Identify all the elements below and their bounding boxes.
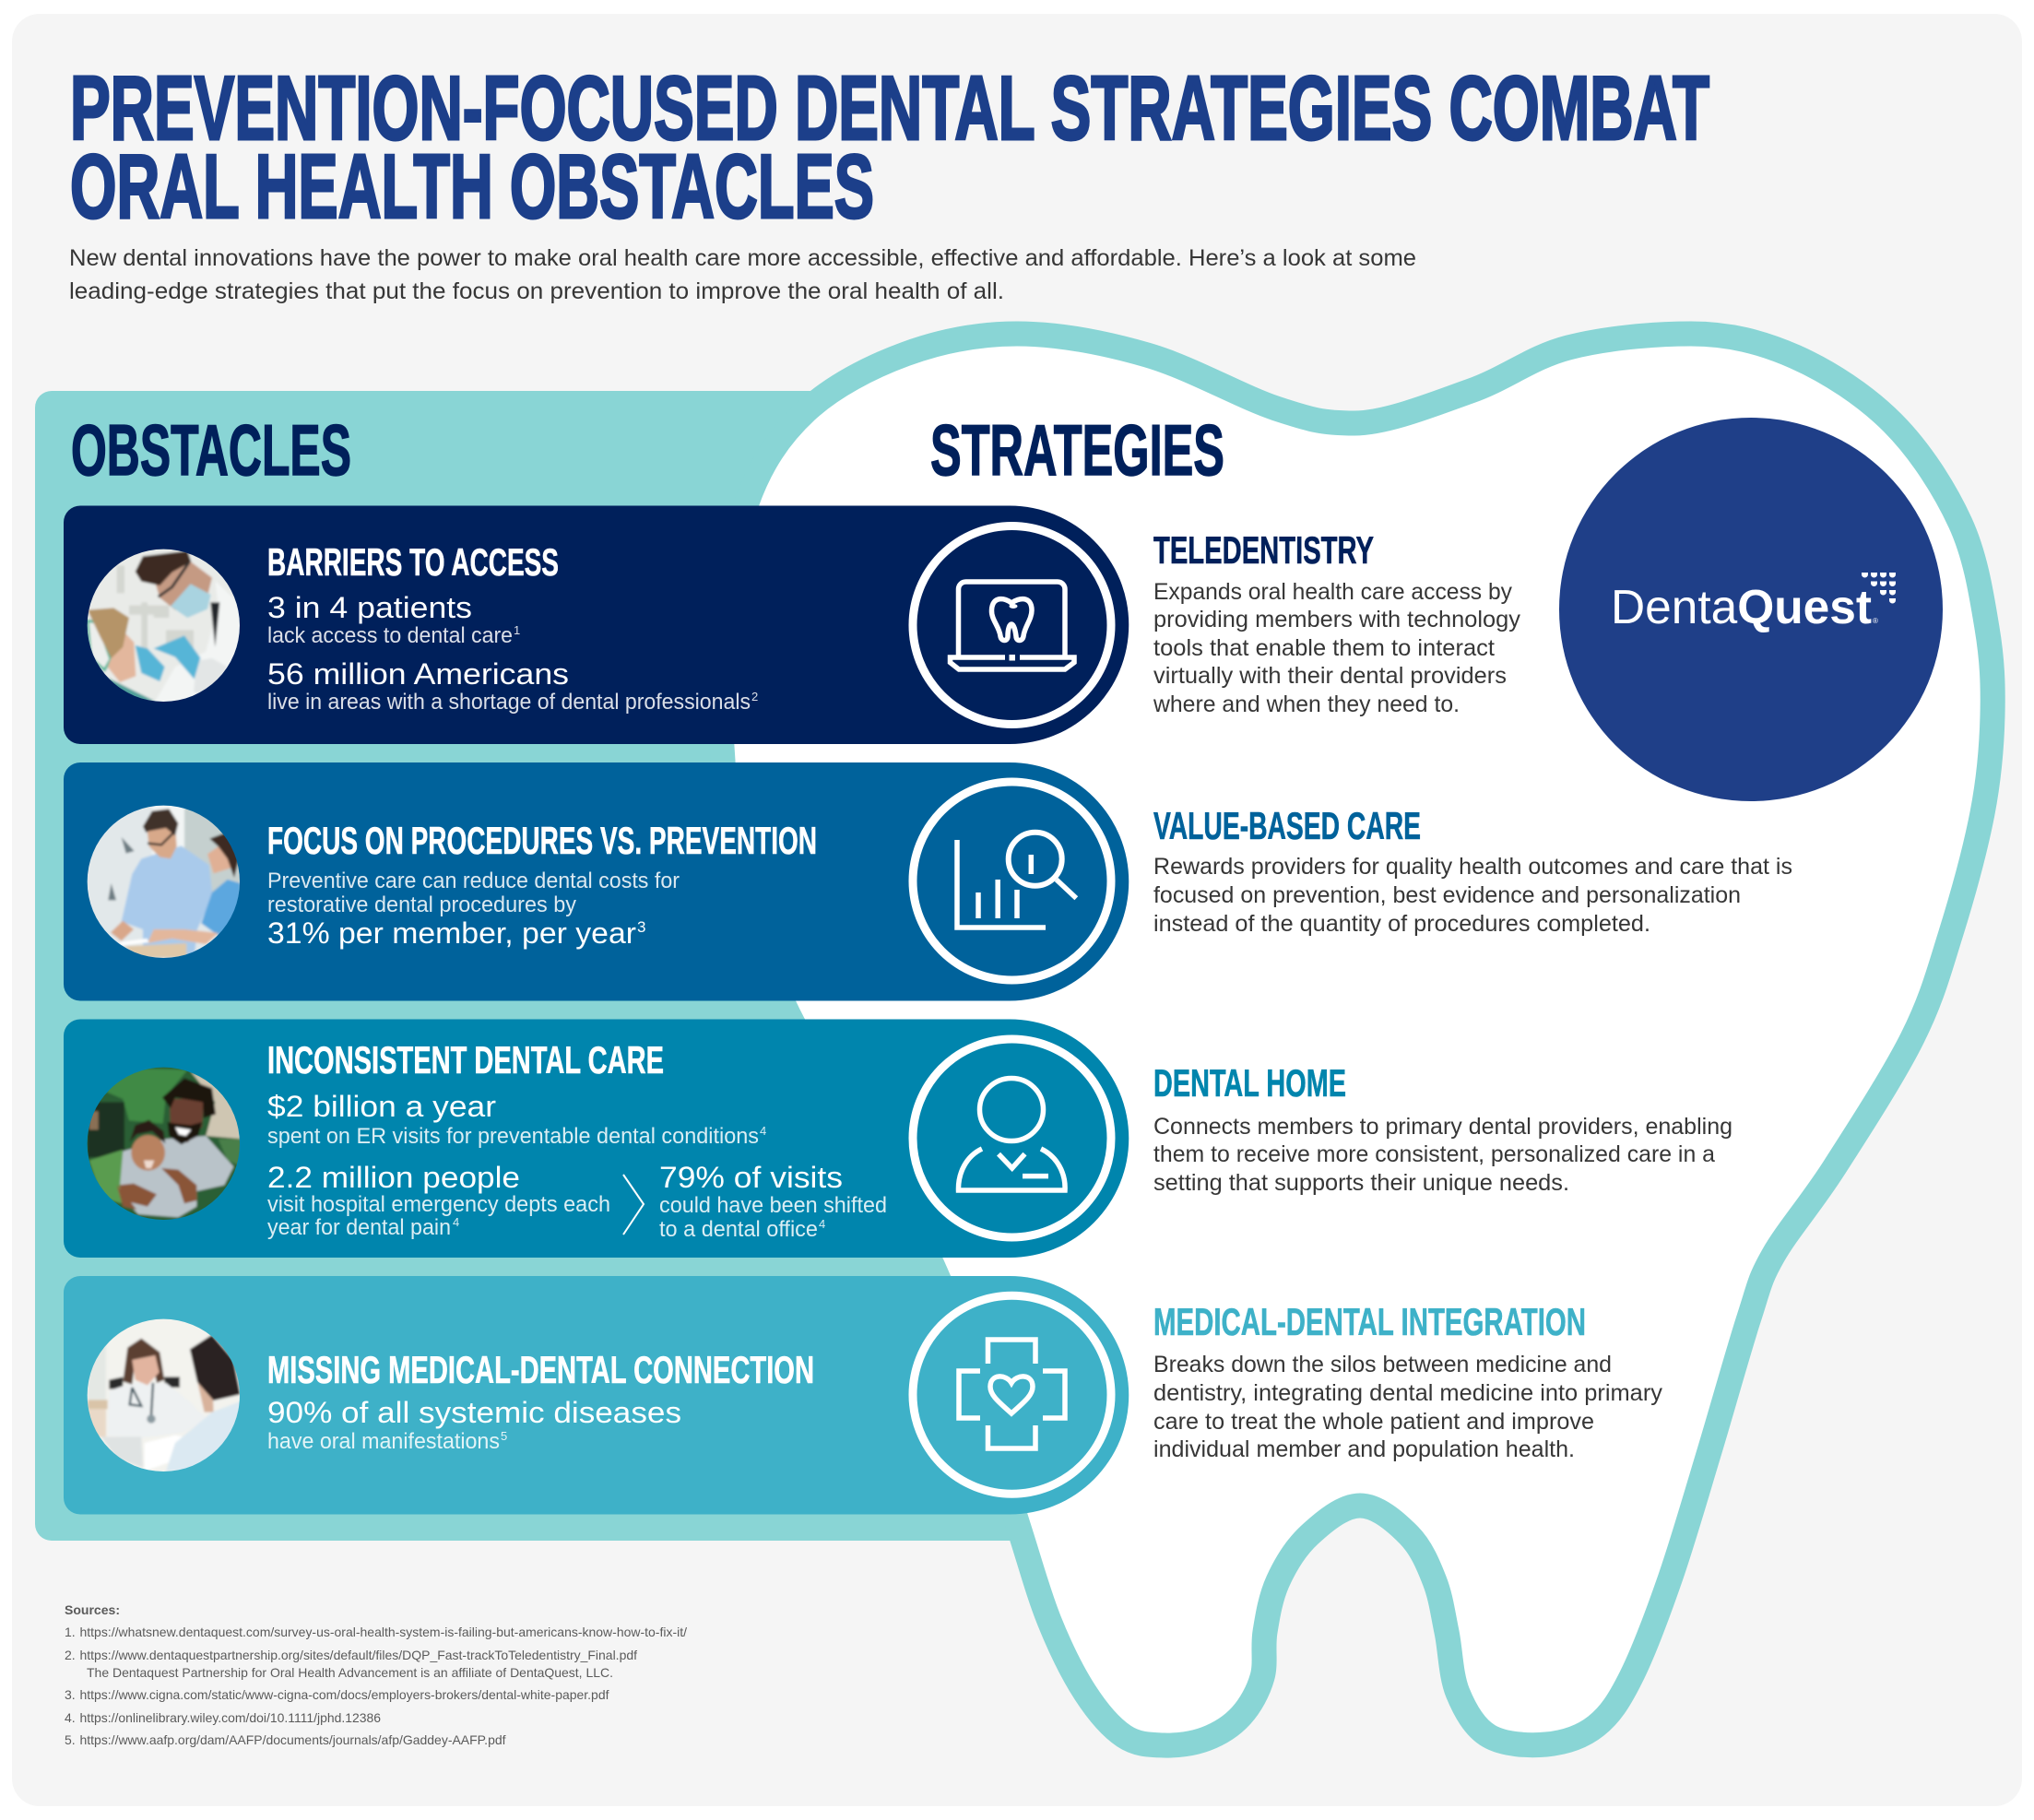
- strategy: medical-dental integration: MEDICAL-DENTAL INTEGRATION: [1153, 1300, 1586, 1343]
- obstacles heading: OBSTACLES: [71, 409, 351, 490]
- strategies heading: STRATEGIES: [930, 409, 1224, 490]
- text: inconsistent dental care: visit hospital emergency depts each: [267, 1192, 610, 1217]
- strategy: teledentistry: virtually with their dental providers: [1153, 663, 1507, 689]
- strategy: dental home: them to receive more consistent, personalized care in a: [1153, 1141, 1715, 1167]
- text: missing medical-dental connection: MISSING MEDICAL-DENTAL CONNECTION: [267, 1348, 814, 1391]
- strategy: teledentistry: [1153, 528, 1521, 717]
- text: inconsistent dental care: $2 billion a year: [267, 1090, 496, 1123]
- title: ORAL HEALTH OBSTACLES: [70, 136, 874, 237]
- strategy: teledentistry: Expands oral health care access by: [1153, 579, 1512, 605]
- icon: chart with magnifier: [913, 782, 1111, 980]
- text: inconsistent dental care: INCONSISTENT DENTAL CARE: [267, 1038, 664, 1081]
- arrow: chevron: [623, 1175, 644, 1235]
- strategy: dental home: [1153, 1061, 1732, 1196]
- text: focus on procedures vs prevention: 31% per member, per year: [267, 916, 636, 950]
- strategy: dental home: DENTAL HOME: [1153, 1061, 1346, 1105]
- text: barriers to access: 1: [514, 623, 520, 637]
- logo circle: DentaQuest: ®: [1873, 617, 1878, 625]
- text: inconsistent dental care: 2.2 million people: [267, 1161, 520, 1194]
- logo circle: DentaQuest: DentaQuest: [1611, 581, 1872, 634]
- text: focus on procedures vs prevention: restorative dental procedures by: [267, 892, 576, 917]
- text: focus on procedures vs prevention: 3: [637, 918, 645, 936]
- obstacles teal panel: [35, 391, 1012, 1541]
- sources: https://www.aafp.org/dam/AAFP/documents/journals/afp/Gaddey-AAFP.pdf: [79, 1732, 506, 1747]
- sources: https://onlinelibrary.wiley.com/doi/10.1111/jphd.12386: [79, 1710, 381, 1725]
- photo: doctor and patient: [87, 1318, 240, 1471]
- strategy: teledentistry: providing members with technology: [1153, 607, 1521, 632]
- logo circle: DentaQuest: [1559, 418, 1943, 801]
- sources: 1.: [65, 1625, 76, 1639]
- sources: https://whatsnew.dentaquest.com/survey-us-oral-health-system-is-failing-but-americans-know-how-to-fix-it/: [79, 1625, 687, 1639]
- text: missing medical-dental connection: 5: [501, 1429, 507, 1443]
- panel: inconsistent dental care: [64, 1020, 1129, 1258]
- intro text: leading-edge strategies that put the focus on prevention to improve the oral health of all.: [69, 278, 1004, 304]
- sources: The Dentaquest Partnership for Oral Health Advancement is an affiliate of DentaQuest, LLC.: [87, 1665, 613, 1680]
- photo: man and woman at a desk: [87, 806, 240, 958]
- text: focus on procedures vs prevention: FOCUS ON PROCEDURES VS. PREVENTION: [267, 819, 817, 862]
- sources: https://www.cigna.com/static/www-cigna-com/docs/employers-brokers/dental-white-paper.pdf: [79, 1687, 609, 1702]
- panel: missing medical-dental connection: [64, 1276, 1129, 1514]
- text: focus on procedures vs prevention: Preventive care can reduce dental costs for: [267, 869, 680, 893]
- text: missing medical-dental connection: [267, 1348, 814, 1454]
- text: missing medical-dental connection: 90% of all systemic diseases: [267, 1396, 681, 1429]
- photo: dentist with child: [87, 550, 240, 702]
- text: barriers to access: [267, 540, 758, 715]
- icon: dental provider: [913, 1039, 1111, 1237]
- text: inconsistent dental care: [267, 1038, 887, 1242]
- text: barriers to access: 2: [751, 690, 758, 703]
- intro text: [69, 245, 1416, 304]
- text: barriers to access: 3 in 4 patients: [267, 591, 472, 624]
- tooth outline: [719, 334, 1993, 1745]
- text: inconsistent dental care: year for dental pain: [267, 1215, 451, 1240]
- sources: https://www.dentaquestpartnership.org/sites/default/files/DQP_Fast-trackToTeledentistry_Final.pdf: [79, 1648, 637, 1662]
- text: focus on procedures vs prevention: [267, 819, 817, 950]
- strategy: value-based care: Rewards providers for quality health outcomes and care that is: [1153, 854, 1792, 880]
- text: inconsistent dental care: 4: [453, 1215, 459, 1229]
- strategy: value-based care: VALUE-BASED CARE: [1153, 804, 1421, 847]
- strategy: teledentistry: where and when they need to.: [1153, 691, 1460, 717]
- title: [70, 57, 1709, 237]
- panel: barriers to access: [64, 505, 1129, 744]
- strategy: value-based care: instead of the quantity of procedures completed.: [1153, 911, 1650, 937]
- text: inconsistent dental care: 79% of visits: [659, 1161, 843, 1194]
- strategy: dental home: Connects members to primary dental providers, enabling: [1153, 1114, 1732, 1140]
- text: missing medical-dental connection: have oral manifestations: [267, 1429, 500, 1454]
- strategy: medical-dental integration: Breaks down the silos between medicine and: [1153, 1352, 1612, 1377]
- strategy: value-based care: [1153, 804, 1792, 937]
- icon: medical cross with heart: [913, 1295, 1111, 1494]
- text: barriers to access: BARRIERS TO ACCESS: [267, 540, 559, 584]
- text: inconsistent dental care: 4: [760, 1124, 766, 1138]
- icon: laptop with tooth: [913, 526, 1111, 725]
- strategy: medical-dental integration: [1153, 1300, 1663, 1462]
- photo: father and child: [87, 1068, 240, 1220]
- strategy: dental home: setting that supports their unique needs.: [1153, 1170, 1569, 1196]
- sources: 3.: [65, 1687, 76, 1702]
- sources: [65, 1602, 687, 1747]
- text: inconsistent dental care: to a dental office: [659, 1217, 818, 1242]
- strategy: teledentistry: TELEDENTISTRY: [1153, 528, 1374, 572]
- text: barriers to access: lack access to dental care: [267, 623, 513, 648]
- sources: 4.: [65, 1710, 76, 1725]
- text: inconsistent dental care: 4: [819, 1217, 825, 1231]
- sources: Sources:: [65, 1602, 120, 1617]
- panel: focus on procedures vs prevention: [64, 762, 1129, 1001]
- intro text: New dental innovations have the power to make oral health care more accessible, effective and affordable. Here’s a look at some: [69, 245, 1416, 271]
- strategy: medical-dental integration: dentistry, integrating dental medicine into primary: [1153, 1380, 1663, 1406]
- text: barriers to access: live in areas with a shortage of dental professionals: [267, 690, 751, 715]
- strategy: value-based care: focused on prevention, best evidence and personalization: [1153, 882, 1741, 908]
- strategy: medical-dental integration: individual member and population health.: [1153, 1436, 1575, 1462]
- text: inconsistent dental care: spent on ER visits for preventable dental conditions: [267, 1124, 759, 1149]
- strategy: medical-dental integration: care to treat the whole patient and improve: [1153, 1409, 1594, 1435]
- sources: 5.: [65, 1732, 76, 1747]
- text: barriers to access: 56 million Americans: [267, 657, 569, 691]
- strategy: teledentistry: tools that enable them to interact: [1153, 635, 1495, 661]
- text: inconsistent dental care: could have been shifted: [659, 1193, 887, 1218]
- sources: 2.: [65, 1648, 76, 1662]
